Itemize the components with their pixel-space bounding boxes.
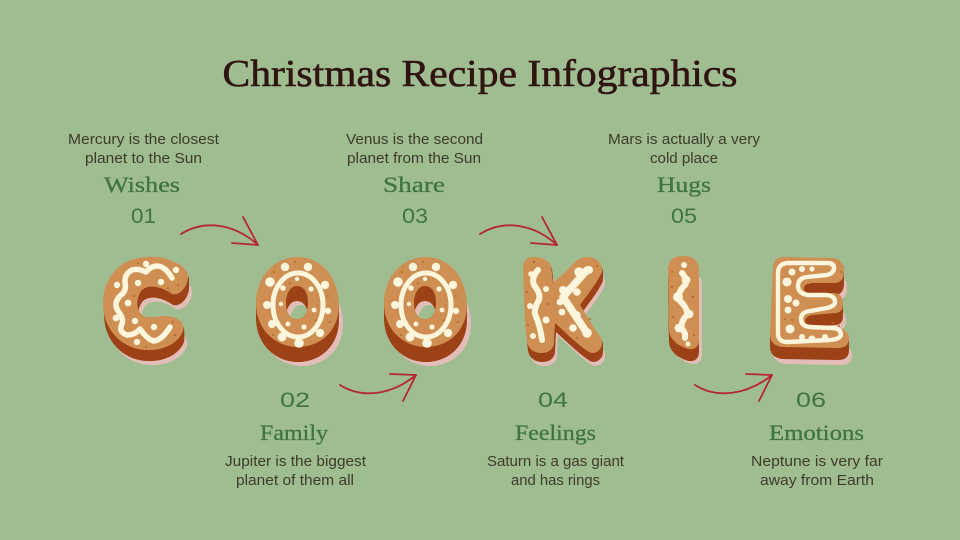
item 06: Emotions: Neptune is very far: [751, 453, 883, 470]
item 03: Share: 03: [402, 205, 428, 228]
item 02: Family: planet of them all: [236, 472, 354, 489]
cookie letter K: [523, 257, 605, 366]
cookie letter E: [770, 257, 852, 365]
item 04: Feelings: Saturn is a gas giant: [487, 453, 625, 470]
cookie letter I: [668, 256, 702, 364]
cookie letter O (first): [256, 257, 343, 366]
item 01: Wishes: 01: [131, 205, 156, 228]
item 04: Feelings: and has rings: [511, 472, 600, 489]
arrow: 01 to 02: [181, 217, 258, 245]
item 05: Hugs: [608, 131, 761, 228]
item 05: Hugs: cold place: [650, 150, 718, 167]
item 06: Emotions: Emotions: [769, 420, 864, 445]
item 03: Share: planet from the Sun: [347, 150, 481, 167]
item 03: Share: [346, 131, 483, 228]
item 01: Wishes: [68, 131, 220, 228]
item 01: Wishes: Mercury is the closest: [68, 131, 220, 148]
arrow: 04 to 05: [695, 374, 772, 401]
item 06: Emotions: away from Earth: [760, 472, 874, 489]
item 04: Feelings: 04: [538, 389, 568, 412]
item 02: Family: 02: [280, 389, 310, 412]
item 05: Hugs: Mars is actually a very: [608, 131, 761, 148]
item 06: Emotions: [751, 389, 883, 489]
item 01: Wishes: planet to the Sun: [85, 150, 202, 167]
item 06: Emotions: 06: [796, 389, 826, 412]
item 02: Family: [225, 389, 367, 489]
item 01: Wishes: Wishes: [104, 172, 180, 197]
item 05: Hugs: 05: [671, 205, 697, 228]
item 04: Feelings: [487, 389, 625, 489]
title: Christmas Recipe Infographics: [222, 53, 738, 95]
item 03: Share: Share: [383, 172, 445, 197]
item 05: Hugs: Hugs: [657, 172, 711, 197]
arrow: 02 to 03: [340, 374, 416, 401]
cookie letter C: [103, 257, 192, 365]
arrow: 03 to 04: [480, 217, 557, 245]
item 03: Share: Venus is the second: [346, 131, 483, 148]
item 02: Family: Jupiter is the biggest: [225, 453, 367, 470]
item 02: Family: Family: [260, 420, 328, 445]
cookie letter O (second): [384, 257, 471, 366]
item 04: Feelings: Feelings: [515, 420, 596, 445]
